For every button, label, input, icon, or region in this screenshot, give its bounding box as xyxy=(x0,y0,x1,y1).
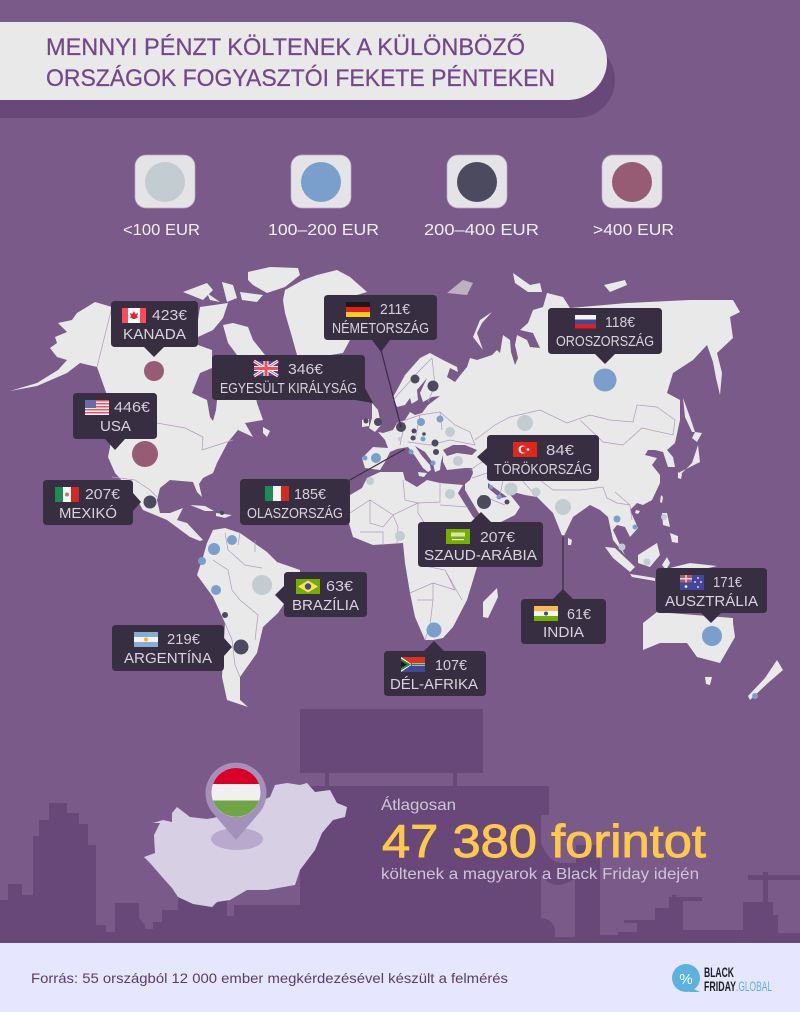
flag: South Africa xyxy=(401,657,425,672)
flag: UK xyxy=(254,361,278,376)
Hungary average spending text: költenek a magyarok a Black Friday idején xyxy=(381,866,699,883)
callout: Brazília: BRAZÍLIA xyxy=(292,597,359,614)
callout: Oroszország: OROSZORSZÁG xyxy=(556,333,654,350)
callout: Brazília: 63€ xyxy=(326,579,353,595)
logo: BLACK xyxy=(704,964,734,980)
country borders xyxy=(97,307,675,677)
footer xyxy=(0,943,800,1012)
callout: Dél-Afrika: 107€ xyxy=(435,658,467,674)
callout: Törökország xyxy=(477,435,599,481)
callout: Mexikó: MEXIKÓ xyxy=(59,505,117,522)
logo: .GLOBAL xyxy=(736,978,772,994)
connector line: Italy xyxy=(348,449,405,481)
flag: Germany xyxy=(346,302,370,317)
callout: Ausztrália: 171€ xyxy=(713,575,742,591)
callout: USA xyxy=(73,393,157,450)
callout: Argentína: 219€ xyxy=(167,632,200,648)
title banner: ORSZÁGOK FOGYASZTÓI FEKETE PÉNTEKEN xyxy=(46,65,555,92)
callout: Szaud-Arábia: SZAUD-ARÁBIA xyxy=(424,547,537,564)
callout: Szaud-Arábia xyxy=(418,512,543,567)
legend item: over 400 EUR: >400 EUR xyxy=(593,222,674,239)
inland seas xyxy=(410,378,507,498)
legend item: under 100 EUR xyxy=(123,155,200,239)
world map xyxy=(10,267,783,707)
source note: Forrás: 55 országból 12 000 ember megkérdezésével készült a felmérés xyxy=(31,970,508,986)
callout: Németország: 211€ xyxy=(380,302,410,318)
map pin with Hungarian flag xyxy=(205,763,266,850)
legend item: 100-200 EUR xyxy=(268,155,379,239)
flag: Australia xyxy=(680,575,704,590)
legend item: 100-200 EUR: 100–200 EUR xyxy=(268,222,379,239)
connector line: Germany xyxy=(381,350,401,427)
Hungary average spending text: Átlagosan xyxy=(381,795,456,814)
title banner xyxy=(0,22,615,118)
legend item: over 400 EUR xyxy=(593,155,674,239)
callout: Oroszország: 118€ xyxy=(605,315,635,331)
callout: USA: 446€ xyxy=(114,400,150,416)
callout: Olaszország: OLASZORSZÁG xyxy=(247,505,343,522)
skyline background xyxy=(0,709,800,943)
data bubbles xyxy=(132,361,758,699)
flag: Brazil xyxy=(296,579,320,594)
callout: Argentína: ARGENTÍNA xyxy=(124,650,212,667)
connector line: India xyxy=(562,535,564,595)
callout: Törökország: 84€ xyxy=(546,443,574,459)
callout: Argentína xyxy=(112,625,232,671)
flag: Russia xyxy=(575,315,596,328)
Hungary average spending text xyxy=(381,795,706,883)
callout: Dél-Afrika xyxy=(384,641,486,696)
callout: Szaud-Arábia: 207€ xyxy=(480,530,515,546)
callout: Brazília xyxy=(275,572,367,617)
legend xyxy=(123,155,674,239)
logo xyxy=(672,964,772,994)
flag: Canada xyxy=(122,308,146,323)
callout: Ausztrália: AUSZTRÁLIA xyxy=(665,593,758,610)
flag: Italy xyxy=(265,486,289,501)
flag: India xyxy=(534,606,558,621)
flag: Mexico xyxy=(55,487,79,502)
logo: % xyxy=(679,971,693,988)
callout: Egyesült Királyság: EGYESÜLT KIRÁLYSÁG xyxy=(220,379,357,397)
Hungary map xyxy=(144,783,347,907)
callout: Mexikó xyxy=(43,480,141,525)
land masses xyxy=(10,267,783,707)
callout: Oroszország xyxy=(548,308,662,364)
logo: FRIDAY xyxy=(704,978,736,994)
callout: Németország xyxy=(324,295,437,427)
callout: USA: USA xyxy=(100,419,131,435)
callout: India xyxy=(521,535,606,644)
title banner: MENNYI PÉNZT KÖLTENEK A KÜLÖNBÖZŐ xyxy=(46,34,525,61)
callout: Ausztrália xyxy=(656,568,767,623)
callout: Olaszország xyxy=(240,449,405,525)
flag: Saudi Arabia xyxy=(446,529,470,544)
callout: Mexikó: 207€ xyxy=(85,487,120,503)
callout: Olaszország: 185€ xyxy=(294,487,326,503)
callout: India: 61€ xyxy=(567,607,591,623)
legend item: 200-400 EUR: 200–400 EUR xyxy=(424,222,539,239)
callout: Kanada: 423€ xyxy=(152,308,187,324)
callout: Dél-Afrika: DÉL-AFRIKA xyxy=(390,676,478,693)
legend item: 200-400 EUR xyxy=(424,155,539,239)
legend item: under 100 EUR: <100 EUR xyxy=(123,222,200,239)
Hungary average spending text: 47 380 forintot xyxy=(382,815,706,867)
callout: Egyesült Királyság xyxy=(212,355,373,403)
callout: Egyesült Királyság: 346€ xyxy=(288,362,323,378)
callout: India: INDIA xyxy=(543,625,584,641)
flag: Argentina xyxy=(134,632,158,647)
flag: Turkey xyxy=(513,442,537,457)
callout: Törökország: TÖRÖKORSZÁG xyxy=(494,460,592,478)
callout: Németország: NÉMETORSZÁG xyxy=(332,320,429,337)
callout: Kanada xyxy=(111,301,198,357)
flag: USA xyxy=(85,400,109,415)
callout: Kanada: KANADA xyxy=(123,327,186,343)
